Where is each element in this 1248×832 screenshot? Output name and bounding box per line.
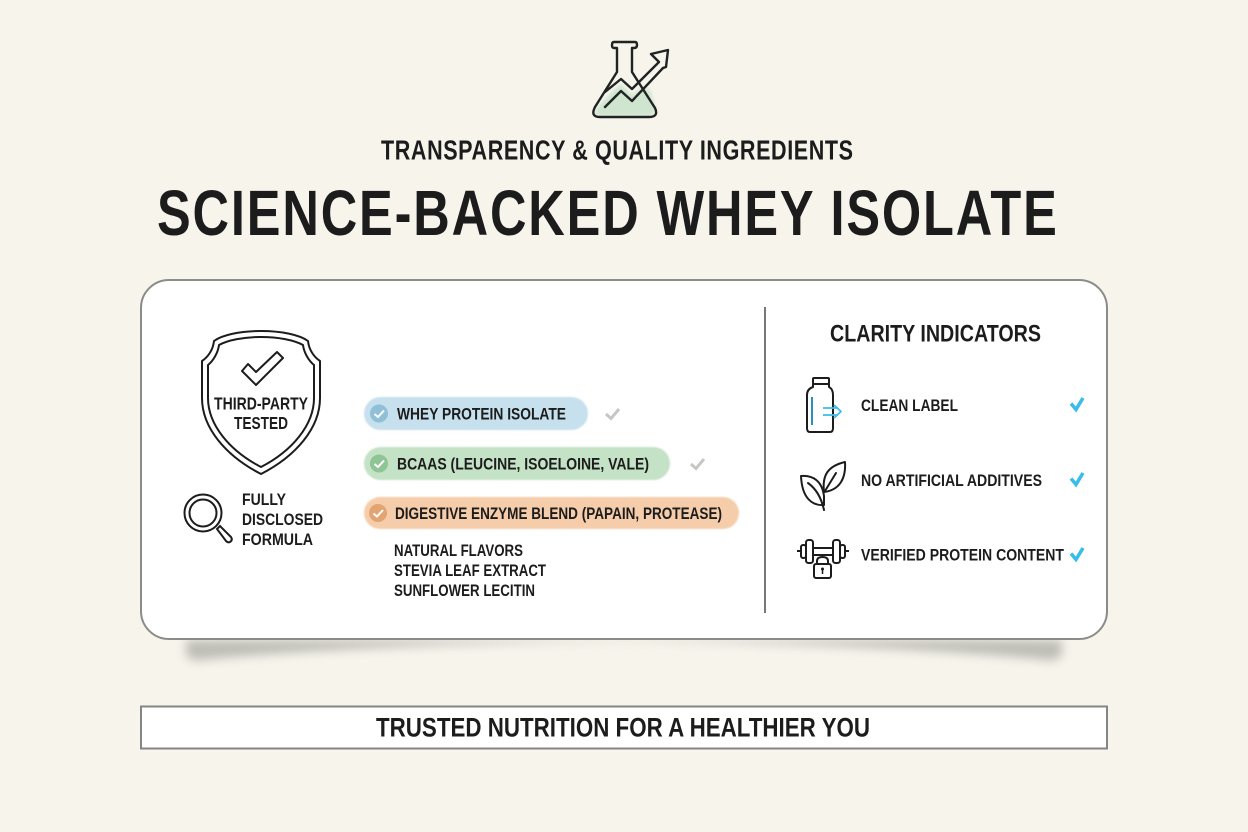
ingredient pill: whey protein isolate (364, 397, 619, 430)
shield label: TESTED (234, 413, 288, 433)
title: SCIENCE-BACKED WHEY ISOLATE (157, 178, 1057, 249)
other ingredients list: SUNFLOWER LECITIN (394, 582, 535, 600)
check: no artificial additives (1071, 473, 1083, 484)
check: clean label (1071, 398, 1083, 410)
ingredient pill: digestive enzyme blend: DIGESTIVE ENZYME BLEND (PAPAIN, PROTEASE) (395, 504, 722, 523)
icon: shield with check (202, 331, 320, 474)
text: fully disclosed formula: FULLY (242, 490, 287, 509)
ingredient pill: BCAAs (364, 447, 704, 480)
other ingredients list (394, 542, 546, 600)
card shadow (186, 640, 1062, 660)
ingredient pill: digestive enzyme blend (364, 497, 739, 529)
icon: dumbbell with padlock (797, 540, 849, 578)
footer banner (141, 706, 1107, 748)
footer banner: TRUSTED NUTRITION FOR A HEALTHIER YOU (376, 712, 870, 742)
shield label (214, 394, 308, 433)
other ingredients list: STEVIA LEAF EXTRACT (394, 562, 546, 580)
heading: clarity indicators: CLARITY INDICATORS (830, 320, 1041, 348)
text: fully disclosed formula: DISCLOSED (242, 510, 323, 529)
subtitle: TRANSPARENCY & QUALITY INGREDIENTS (381, 135, 853, 166)
icon: magnifying glass (184, 494, 232, 542)
icon: flask with rising arrow (593, 42, 668, 117)
panel: main card (141, 280, 1107, 639)
icon: leaves (801, 462, 845, 510)
shield label: THIRD-PARTY (214, 394, 308, 414)
check: verified protein content (1071, 548, 1083, 560)
text: clean label: CLEAN LABEL (861, 396, 958, 415)
text: verified protein content: VERIFIED PROTEIN CONTENT (861, 546, 1065, 564)
text: no artificial additives: NO ARTIFICIAL ADDITIVES (861, 471, 1042, 490)
text: fully disclosed formula (242, 490, 323, 549)
ingredient pill: BCAAs: BCAAS (LEUCINE, ISOELOINE, VALE) (397, 454, 649, 474)
icon: bottle (807, 378, 841, 432)
text: fully disclosed formula: FORMULA (242, 530, 313, 549)
ingredient pill: whey protein isolate: WHEY PROTEIN ISOLATE (397, 404, 566, 424)
other ingredients list: NATURAL FLAVORS (394, 542, 523, 560)
